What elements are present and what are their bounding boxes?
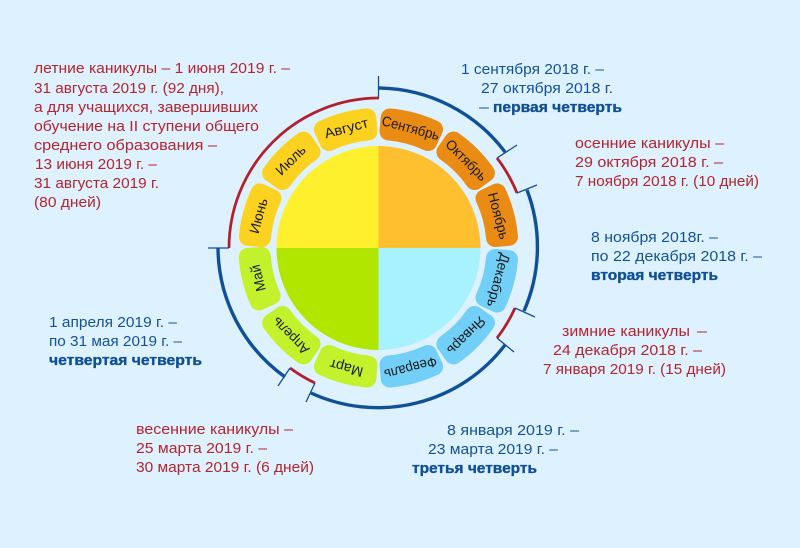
arc: winter holidays — [497, 308, 515, 338]
text: spring holidays — [136, 422, 314, 476]
arc: first quarter — [379, 88, 505, 152]
month: Январь: Январь — [444, 313, 489, 359]
text: fourth quarter: 1 апреля 2019 г. – — [49, 315, 178, 331]
text: summer holidays: среднего образования – — [34, 138, 218, 154]
month ring — [244, 112, 514, 383]
text: winter holidays — [543, 324, 726, 378]
arc: second quarter — [524, 190, 537, 311]
text: second quarter: вторая четверть — [591, 268, 718, 284]
text: first quarter: 1 сентября 2018 г. – — [461, 62, 605, 78]
outer ring: quarters and holidays — [208, 76, 537, 408]
text: spring holidays: 30 марта 2019 г. (6 дней) — [136, 460, 314, 476]
text: first quarter: 27 октября 2018 г. — [481, 81, 613, 97]
text: autumn holidays: осенние каникулы – — [575, 136, 725, 152]
arc: fourth quarter — [218, 248, 285, 377]
month: Август: Август — [322, 114, 371, 141]
text: summer holidays: летние каникулы – 1 июня 2019 г. – — [34, 61, 291, 77]
tick marks — [208, 76, 537, 402]
text: summer holidays: 31 августа 2019 г. (92 дня), — [34, 81, 224, 97]
text: winter holidays: 7 января 2019 г. (15 дней) — [543, 362, 726, 378]
month: Июнь: Июнь — [246, 196, 271, 235]
text: summer holidays: 13 июня 2019 г. – — [35, 157, 158, 173]
text: second quarter: 8 ноября 2018г. – — [591, 230, 719, 246]
month: Октябрь: Октябрь — [442, 136, 491, 184]
month: Март — [322, 353, 371, 382]
text: fourth quarter: четвертая четверть — [49, 353, 202, 369]
text: winter holidays: – — [697, 324, 708, 340]
text: third quarter: 23 марта 2019 г. – — [428, 442, 559, 458]
month: Май: Май — [247, 263, 269, 293]
text: second quarter: по 22 декабря 2018 г. – — [591, 249, 763, 265]
text: summer holidays — [34, 61, 291, 211]
text: autumn holidays: 7 ноября 2018 г. (10 дней) — [575, 174, 759, 190]
text: third quarter — [412, 423, 580, 477]
month: Ноябрь: Ноябрь — [485, 191, 513, 241]
text: first quarter: первая четверть — [493, 100, 622, 116]
month: Март: Март — [327, 356, 365, 380]
text: autumn holidays — [575, 136, 759, 190]
text: winter holidays: зимние каникулы — [562, 324, 690, 340]
month: Май — [244, 254, 272, 302]
month: Декабрь: Декабрь — [484, 252, 514, 309]
month: Июль: Июль — [272, 142, 309, 178]
text: winter holidays: 24 декабря 2018 г. – — [553, 343, 703, 359]
text: spring holidays: 25 марта 2019 г. – — [136, 441, 268, 457]
text: autumn holidays: 29 октября 2018 г. – — [575, 155, 724, 171]
text: summer holidays: (80 дней) — [34, 195, 101, 211]
month: Апрель: Апрель — [269, 314, 312, 358]
pie: four seasons — [276, 146, 480, 350]
text: third quarter: третья четверть — [412, 461, 537, 477]
text: summer holidays: а для учащихся, завершивших — [34, 100, 259, 116]
text: first quarter — [461, 62, 622, 116]
arc: summer holidays — [229, 98, 379, 248]
text: summer holidays: обучение на II ступени общего — [34, 119, 259, 135]
text: second quarter — [591, 230, 763, 284]
month: Июль — [269, 138, 313, 183]
month: Февраль: Февраль — [383, 354, 439, 383]
arc: autumn holidays — [497, 158, 517, 193]
text: fourth quarter: по 31 мая 2019 г. – — [49, 334, 183, 350]
month: Сентябрь: Сентябрь — [380, 112, 441, 143]
text: fourth quarter — [49, 315, 202, 369]
text: spring holidays: весенние каникулы – — [136, 422, 294, 438]
arc: spring holidays — [290, 368, 315, 383]
text: first quarter: – — [479, 100, 490, 116]
text: third quarter: 8 января 2019 г. – — [447, 423, 580, 439]
arc: third quarter — [311, 345, 505, 408]
text: summer holidays: 31 августа 2019 г. — [34, 176, 159, 192]
month: Июнь — [245, 192, 273, 240]
